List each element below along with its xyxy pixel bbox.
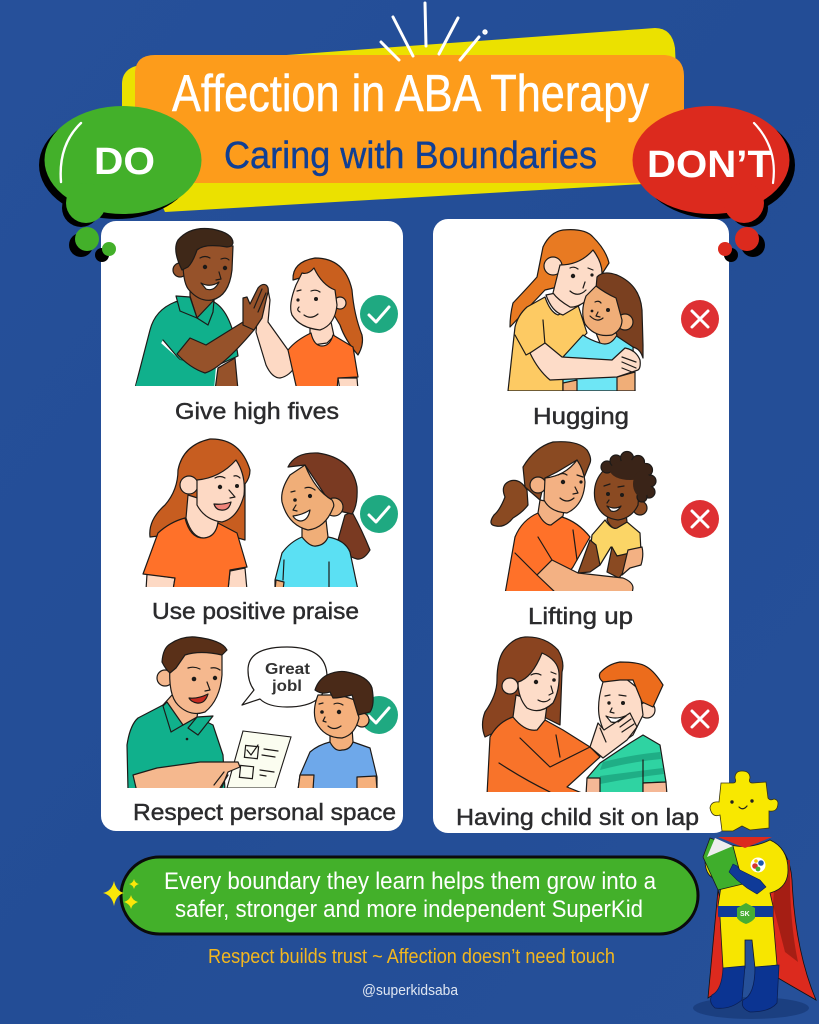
label: Hugging [533, 403, 629, 429]
label: Lifting up [528, 603, 633, 629]
banner orange front [135, 55, 684, 183]
book [703, 838, 743, 890]
illustration: praising with checklist: Great [265, 661, 310, 678]
DO label: DO [94, 141, 155, 183]
illustration: high five [135, 228, 362, 390]
shield badge [737, 903, 755, 924]
cape [708, 840, 816, 1000]
illustration: hugging [508, 230, 643, 391]
don't item: hugging [508, 230, 719, 429]
check badge [360, 696, 398, 734]
don't item: sit on lap [456, 637, 719, 830]
message pill [121, 857, 698, 934]
check badge [360, 495, 398, 533]
puzzle head [710, 771, 778, 831]
don't item: lifting up [491, 442, 719, 629]
belt [718, 906, 773, 917]
cross badge [681, 700, 719, 738]
illustration: lifting up [491, 442, 656, 594]
illustration: child face touched [482, 637, 667, 795]
panel: don't list [433, 219, 729, 833]
message line 2: safer, stronger and more independent SuperKid [175, 896, 643, 923]
sparkle lines [381, 3, 486, 60]
illustration: praise [143, 439, 370, 590]
label: Respect personal space [133, 799, 396, 825]
do card background [101, 221, 403, 831]
banner yellow back [122, 28, 676, 212]
mascot: puzzle superhero [693, 771, 816, 1019]
label: Give high fives [175, 398, 339, 424]
don't card background [433, 219, 729, 833]
title banner [122, 28, 684, 212]
cross badge [681, 500, 719, 538]
DO thought bubble [39, 106, 202, 257]
logo badge [750, 858, 766, 872]
tagline: Respect builds trust ~ Affection doesn’t need touch [208, 946, 615, 968]
message line 1: Every boundary they learn helps them grow into a [164, 868, 657, 895]
cross badge [681, 300, 719, 338]
check badge [360, 295, 398, 333]
glove [729, 864, 766, 894]
do item: positive praise [143, 439, 398, 624]
thought bubble small dots over cards [95, 242, 738, 262]
DON'T thought bubble [632, 106, 795, 257]
label: Use positive praise [152, 598, 359, 624]
DON'T label: DON’T [647, 144, 772, 186]
boots [711, 965, 779, 1012]
do item: give high fives [135, 228, 398, 424]
illustration: praising with checklist: jobl [271, 678, 302, 695]
icon: sparkles [103, 879, 139, 909]
label: Having child sit on lap [456, 804, 699, 830]
subtitle: Caring with Boundaries [224, 135, 597, 177]
shield badge: SK [740, 911, 750, 918]
handle: @superkidsaba [362, 983, 459, 999]
do item: respect personal space [127, 637, 398, 825]
body [705, 840, 788, 968]
title: Affection in ABA Therapy [172, 65, 649, 123]
illustration: praising with checklist [127, 637, 377, 792]
panel: do list [101, 221, 403, 831]
